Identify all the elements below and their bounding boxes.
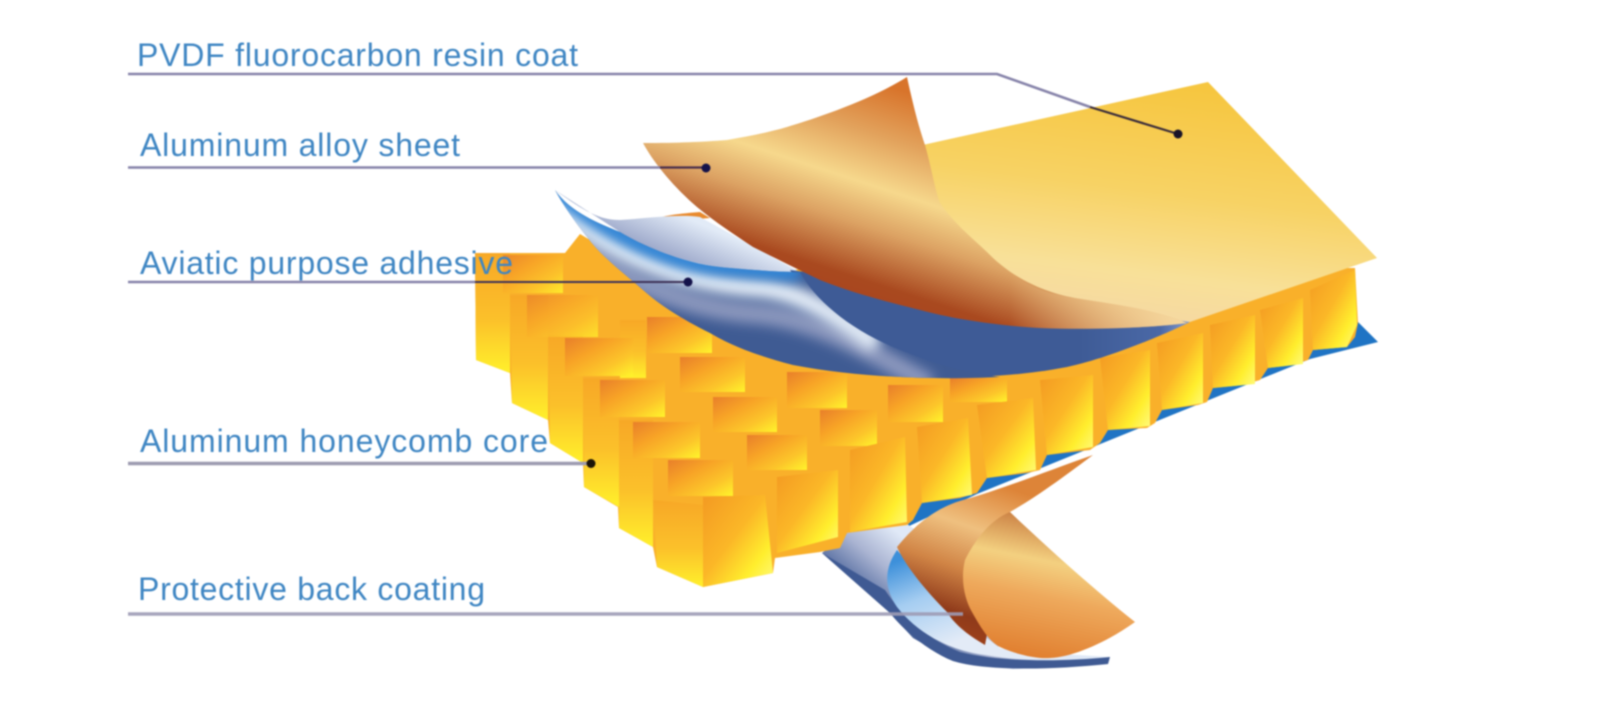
aluminum alloy sheet [643, 77, 1187, 329]
adhesive dark tail [790, 270, 1190, 377]
back coating blue strip [880, 322, 1378, 528]
label: Aluminum honeycomb core [128, 423, 596, 468]
adhesive back sheet [555, 190, 805, 275]
label: PVDF fluorocarbon resin coat [128, 37, 1182, 138]
honeycomb core [475, 234, 1358, 587]
label: Protective back coating: Protective back coating [138, 571, 485, 607]
honeycomb base [475, 234, 1358, 587]
diagram: panel layers [475, 77, 1378, 669]
label: Aviatic purpose adhesive [128, 245, 692, 286]
label: PVDF fluorocarbon resin coat: PVDF fluorocarbon resin coat [137, 37, 578, 73]
lower dark blue edge [822, 553, 1110, 669]
lower brown back curl [897, 455, 1093, 645]
PVDF coat sheet [900, 82, 1377, 323]
sheet fade to coat [1010, 272, 1187, 329]
lower brown front curl [963, 512, 1135, 658]
lower back sheet [822, 524, 1110, 669]
label: Aviatic purpose adhesive: Aviatic purpose adhesive [140, 245, 513, 281]
adhesive front sheet [554, 190, 1000, 380]
orange sliver [655, 212, 710, 222]
label: Aluminum honeycomb core: Aluminum honeycomb core [140, 423, 548, 459]
label: Aluminum alloy sheet [128, 127, 710, 172]
lower blue inner sheet [887, 550, 1073, 660]
honeycomb cell faces [503, 255, 1007, 496]
label: Aluminum alloy sheet: Aluminum alloy sheet [140, 127, 460, 163]
lower curled sheets [822, 455, 1135, 669]
honeycomb front faces [703, 270, 1357, 587]
honeycomb left stepped faces [475, 253, 703, 587]
